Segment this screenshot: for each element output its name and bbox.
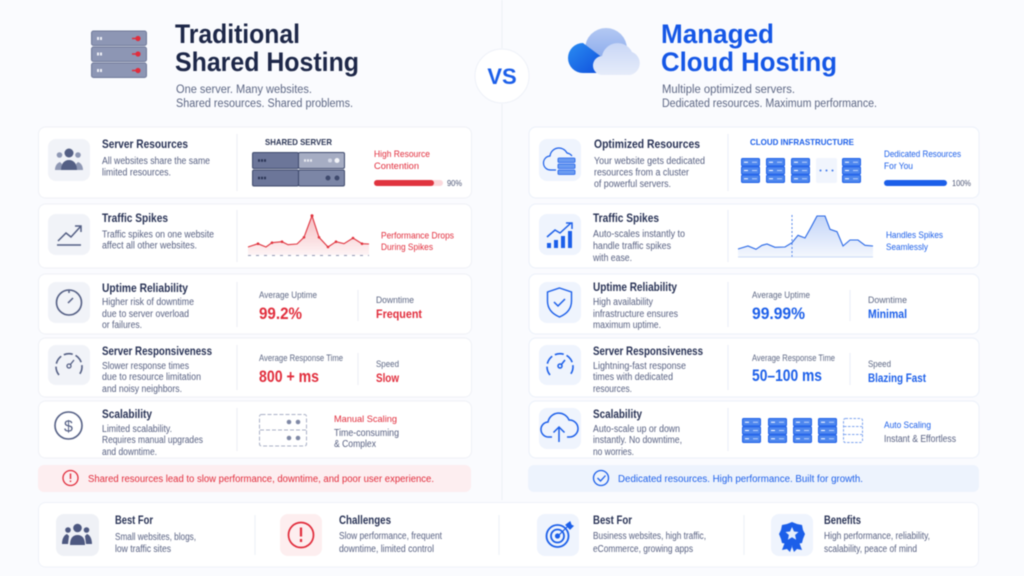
subtitle (176, 84, 353, 110)
summary: benefits: scalability, peace of mind (824, 544, 917, 555)
text: uptime reliability: maximum uptime. (593, 320, 661, 331)
label: performance drops: During Spikes (381, 242, 433, 252)
summary: best for managed: Business websites, high traffic, (593, 531, 706, 542)
panel: summary (38, 502, 978, 567)
stat: speed (868, 359, 926, 385)
text: scalability: Scalability (593, 409, 643, 421)
text: optimized resources: of powerful servers. (594, 179, 671, 190)
label: handles spikes: Seamlessly (886, 242, 928, 252)
summary: benefits: Benefits (824, 515, 861, 527)
stat: average uptime: 99.99% (752, 304, 805, 323)
icon: server stack (92, 31, 146, 78)
gauge: high resource contention: High Resource (374, 149, 430, 159)
stat: speed (376, 359, 399, 385)
panel: left server resources (38, 127, 472, 198)
diagram: shared server: SHARED SERVER (265, 137, 332, 147)
text: scalability (102, 409, 203, 458)
subtitle: Shared resources. Shared problems. (176, 98, 353, 110)
subtitle: Multiple optimized servers. (662, 84, 795, 96)
right header: managed cloud hosting (568, 19, 877, 110)
stat: downtime (868, 295, 907, 321)
text: uptime reliability: due to server overload (102, 309, 189, 320)
text: traffic spikes: Traffic Spikes (102, 213, 168, 225)
icon: cloud upload (539, 408, 581, 449)
subtitle: Dedicated resources. Maximum performance. (662, 98, 877, 110)
icon: clock dial (48, 282, 90, 323)
summary: best for managed: Best For (593, 515, 632, 527)
title: Traditional (175, 19, 300, 49)
text: scalability: Auto-scale up or down (593, 424, 680, 435)
summary: best for shared: Small websites, blogs, (115, 532, 196, 543)
gauge: high resource contention: Contention (374, 161, 419, 171)
icon: cloud (568, 28, 640, 75)
panel: left uptime reliability (38, 274, 472, 334)
text: traffic spikes: handle traffic spikes (593, 241, 671, 252)
icon: dashed server (260, 414, 306, 446)
text: server responsiveness: Lightning-fast response (593, 361, 686, 372)
text: uptime reliability: Uptime Reliability (102, 283, 189, 295)
text: server responsiveness (593, 346, 703, 395)
icon: shield check (539, 282, 581, 323)
icon: growth bars (539, 214, 581, 255)
label: performance drops: Performance Drops (381, 230, 454, 240)
text: scalability: Scalability (102, 409, 153, 421)
stat: speed: Blazing Fast (868, 373, 926, 385)
title (175, 19, 359, 77)
text: traffic spikes: affect all other websites. (102, 240, 197, 252)
label: auto scaling: Auto Scaling (884, 420, 931, 430)
panel: right optimized resources (529, 127, 979, 198)
text: traffic spikes (102, 213, 214, 252)
icon: users (56, 514, 99, 556)
stat: speed: Speed (376, 359, 399, 369)
text: traffic spikes: Traffic Spikes (593, 213, 659, 225)
text: server resources (102, 139, 210, 178)
text: scalability: Limited scalability. (102, 424, 172, 435)
summary: benefits: High performance, reliability, (824, 531, 930, 542)
stat: average uptime (259, 290, 317, 323)
text: server responsiveness: and noisy neighbors. (102, 384, 182, 395)
text: scalability (593, 409, 682, 458)
panel: left scalability (38, 401, 472, 458)
title: Shared Hosting (175, 47, 359, 77)
text: traffic spikes: Traffic spikes on one website (102, 230, 214, 240)
summary: benefits (771, 514, 930, 556)
label: handles spikes: Handles Spikes (886, 230, 943, 240)
gauge: dedicated resources: For You (884, 161, 913, 171)
text: uptime reliability: Higher risk of downtime (102, 297, 194, 308)
text: server responsiveness: Server Responsiveness (102, 346, 212, 358)
stat: average response time (752, 353, 835, 385)
summary: challenges: Challenges (339, 515, 391, 527)
text: server responsiveness: times with dedicated (593, 372, 673, 383)
stat: average response time: Average Response Time (259, 353, 343, 363)
text: traffic spikes: Auto-scales instantly to (593, 229, 685, 240)
stat: average uptime: Average Uptime (259, 290, 317, 300)
icon: alert (280, 514, 322, 556)
text: server responsiveness: Slower response times (102, 361, 189, 372)
stat: downtime: Downtime (868, 295, 907, 305)
text: scalability: Requires manual upgrades (102, 435, 203, 446)
label: handles spikes (886, 230, 943, 252)
gauge: dedicated resources: 100% (952, 178, 971, 188)
text: scalability: and downtime. (102, 447, 157, 458)
panel: left server responsiveness (38, 338, 472, 397)
callout: right assurance: Dedicated resources. High performance. Built for growth. (618, 474, 863, 485)
text: uptime reliability (593, 282, 678, 331)
text: optimized resources: Your website gets dedicated (594, 156, 705, 167)
icon: check circle (594, 470, 608, 486)
text: server resources: limited resources. (102, 168, 171, 178)
text: uptime reliability (102, 283, 194, 331)
icon: trend line (48, 214, 90, 255)
title (661, 19, 837, 77)
vs badge: VS (487, 64, 517, 89)
panel: left traffic spikes (38, 204, 472, 268)
stat: average response time: Average Response Time (752, 353, 835, 363)
text: server responsiveness (102, 346, 212, 395)
left header: traditional shared hosting (92, 19, 359, 110)
stat: downtime: Frequent (376, 309, 422, 321)
summary: best for shared: Best For (115, 515, 153, 527)
icon: award badge (771, 514, 813, 556)
text: traffic spikes (592, 213, 685, 264)
diagram: auto scaling servers (742, 418, 862, 442)
label: auto scaling (884, 420, 956, 445)
text: server responsiveness: resources. (593, 384, 632, 395)
panel: right traffic spikes (529, 204, 979, 268)
stat: average uptime: 99.2% (259, 304, 302, 323)
panel: right scalability (529, 401, 979, 458)
label: manual scaling: Manual Scaling (334, 414, 397, 425)
stat: average uptime: Average Uptime (752, 290, 810, 300)
icon: speedometer (48, 345, 90, 385)
summary: best for shared: low traffic sites (115, 544, 171, 555)
summary: best for shared (56, 514, 196, 556)
text: traffic spikes: with ease. (592, 253, 632, 264)
stat: average response time: 800 + ms (259, 367, 319, 386)
text: uptime reliability: or failures. (102, 320, 142, 331)
icon: speedometer (539, 345, 581, 385)
text: server responsiveness: Server Responsiveness (593, 346, 703, 358)
vs badge (475, 49, 529, 103)
chart: handles spikes (738, 215, 873, 257)
label: manual scaling (334, 414, 399, 450)
stat: average response time: 50–100 ms (752, 366, 822, 385)
text: optimized resources: resources from a cluster (594, 168, 690, 178)
chart: performance drops (248, 214, 369, 256)
summary: best for managed: eCommerce, growing apps (593, 544, 693, 555)
text: server responsiveness: due to resource limitation (102, 372, 201, 383)
text: uptime reliability: Uptime Reliability (593, 282, 678, 294)
label: manual scaling: & Complex (334, 439, 376, 450)
icon: dollar (55, 412, 82, 439)
callout: right assurance (528, 465, 979, 492)
diagram: shared server (252, 137, 344, 186)
icon: cloud server (539, 139, 581, 181)
stat: downtime (376, 295, 422, 321)
text: server resources: All websites share the same (102, 156, 210, 167)
stat: speed: Speed (868, 359, 891, 369)
gauge: dedicated resources (884, 149, 971, 188)
gauge: dedicated resources: Dedicated Resources (884, 149, 961, 159)
text: server resources: Server Resources (102, 139, 188, 151)
icon: target (537, 514, 579, 556)
summary: challenges: Slow performance, frequent (339, 531, 442, 542)
text: scalability: no worries. (593, 447, 634, 458)
title: Cloud Hosting (661, 47, 837, 77)
text: scalability: instantly. No downtime, (593, 435, 682, 446)
label: manual scaling: Time-consuming (334, 428, 399, 439)
title: Managed (661, 19, 774, 49)
subtitle: One server. Many websites. (176, 84, 312, 96)
callout: left warning (38, 465, 471, 492)
text: uptime reliability: High availability (593, 297, 653, 308)
text: optimized resources: Optimized Resources (594, 139, 700, 151)
icon: warning (63, 470, 78, 486)
diagram: cloud infrastructure: CLOUD INFRASTRUCTURE (750, 137, 854, 147)
summary: best for managed (537, 514, 706, 556)
subtitle (662, 84, 877, 110)
text: uptime reliability: infrastructure ensures (593, 309, 678, 320)
summary: challenges (280, 514, 442, 556)
panel: right uptime reliability (529, 274, 979, 334)
summary: challenges: downtime, limited control (339, 544, 434, 555)
stat: average uptime (752, 290, 810, 323)
diagram: cloud infrastructure (742, 137, 860, 183)
label: auto scaling: Instant & Effortless (884, 434, 956, 445)
callout: left warning: Shared resources lead to slow performance, downtime, and poor user experience. (88, 474, 434, 485)
stat: speed: Slow (376, 373, 399, 385)
text: optimized resources (594, 139, 705, 190)
gauge: high resource contention: 90% (447, 178, 462, 188)
icon: dollar: $ (64, 418, 73, 436)
gauge: high resource contention (374, 149, 462, 188)
stat: average response time (259, 353, 343, 386)
stat: downtime: Downtime (376, 295, 414, 305)
icon: users (48, 139, 90, 181)
label: performance drops (381, 230, 454, 252)
panel: right server responsiveness (529, 338, 979, 397)
stat: downtime: Minimal (868, 309, 907, 321)
